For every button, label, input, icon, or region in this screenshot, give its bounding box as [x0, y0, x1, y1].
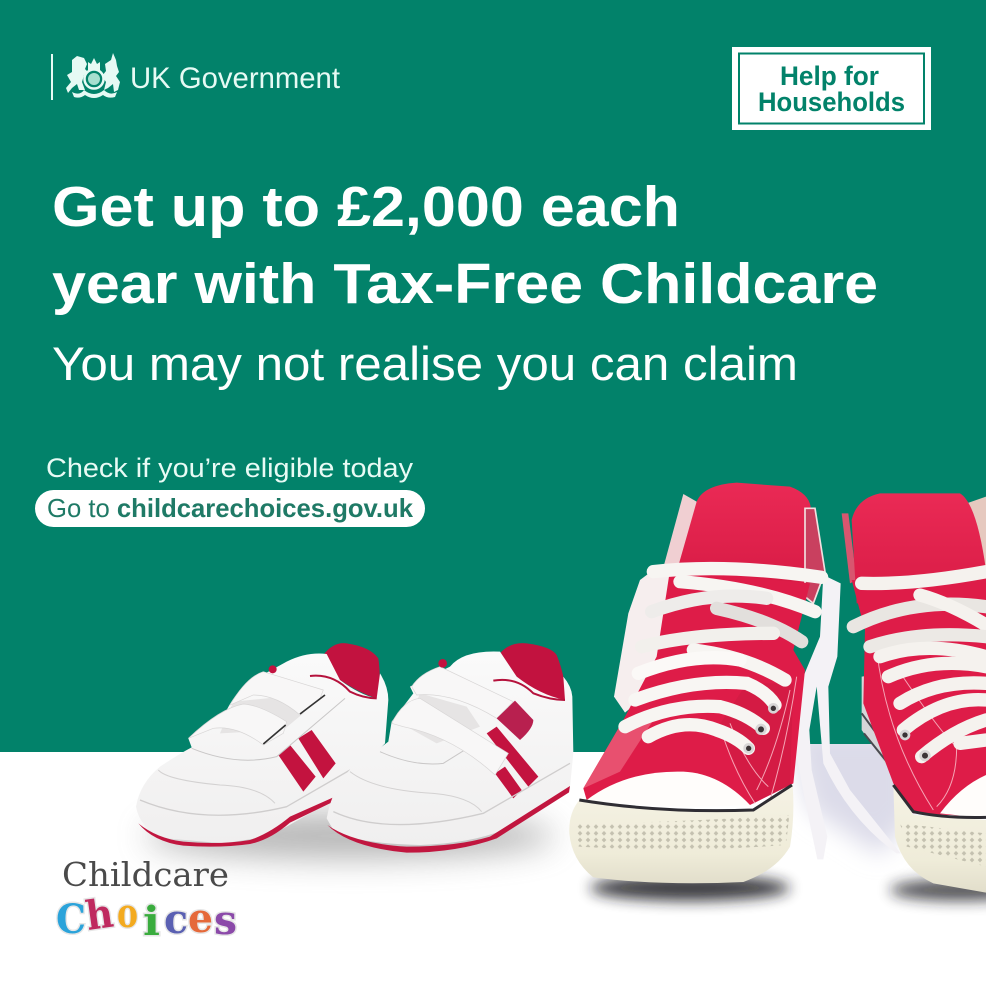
small shoe right [327, 643, 573, 853]
Help for Households badge: Households [758, 87, 905, 117]
headline [52, 175, 878, 316]
colourful Choices wordmark: e [188, 895, 213, 942]
colourful Choices wordmark: c [164, 896, 188, 943]
white floor [0, 752, 986, 986]
headline: Get up to £2,000 each [52, 175, 680, 239]
icon: royal coat of arms [66, 53, 120, 98]
Help for Households badge: Help for [780, 61, 879, 91]
floor behind large shoes [700, 744, 986, 764]
eligibility prompt: Check if you’re eligible today [46, 453, 414, 483]
Childcare Choices logo: Childcare [62, 855, 229, 894]
right shoe shadow [890, 879, 986, 901]
large shoe left [569, 483, 825, 883]
right shoe eyelets [901, 731, 929, 760]
headline: year with Tax-Free Childcare [52, 252, 878, 316]
small shoe left [136, 643, 388, 847]
UK Government logo [51, 53, 341, 100]
large shoes floor shadow [590, 875, 790, 901]
lavender floor shading [790, 730, 915, 855]
Childcare Choices logo [56, 855, 237, 945]
colourful Choices wordmark: s [214, 897, 237, 944]
colourful Choices wordmark: o [117, 890, 138, 937]
laces [625, 569, 822, 748]
colourful Choices wordmark: i [143, 898, 160, 945]
website pill: Go to childcarechoices.gov.uk [47, 493, 414, 523]
colourful Choices wordmark: C [56, 896, 86, 943]
right shoe laces [853, 572, 986, 757]
small white trainers [136, 643, 573, 853]
Help for Households badge [732, 47, 931, 130]
subheading: You may not realise you can claim [52, 337, 798, 390]
small shoes shadow [145, 814, 555, 858]
hanging lace [796, 575, 901, 859]
colourful Choices wordmark [56, 890, 237, 945]
colourful Choices wordmark: h [83, 890, 116, 940]
large shoe right [842, 493, 986, 893]
pale lace flap [614, 565, 673, 713]
green background [0, 0, 986, 753]
large red high-top shoes [569, 483, 986, 893]
sole [569, 785, 793, 883]
eyelets [745, 704, 777, 752]
logo wordmark: UK Government [130, 62, 341, 95]
